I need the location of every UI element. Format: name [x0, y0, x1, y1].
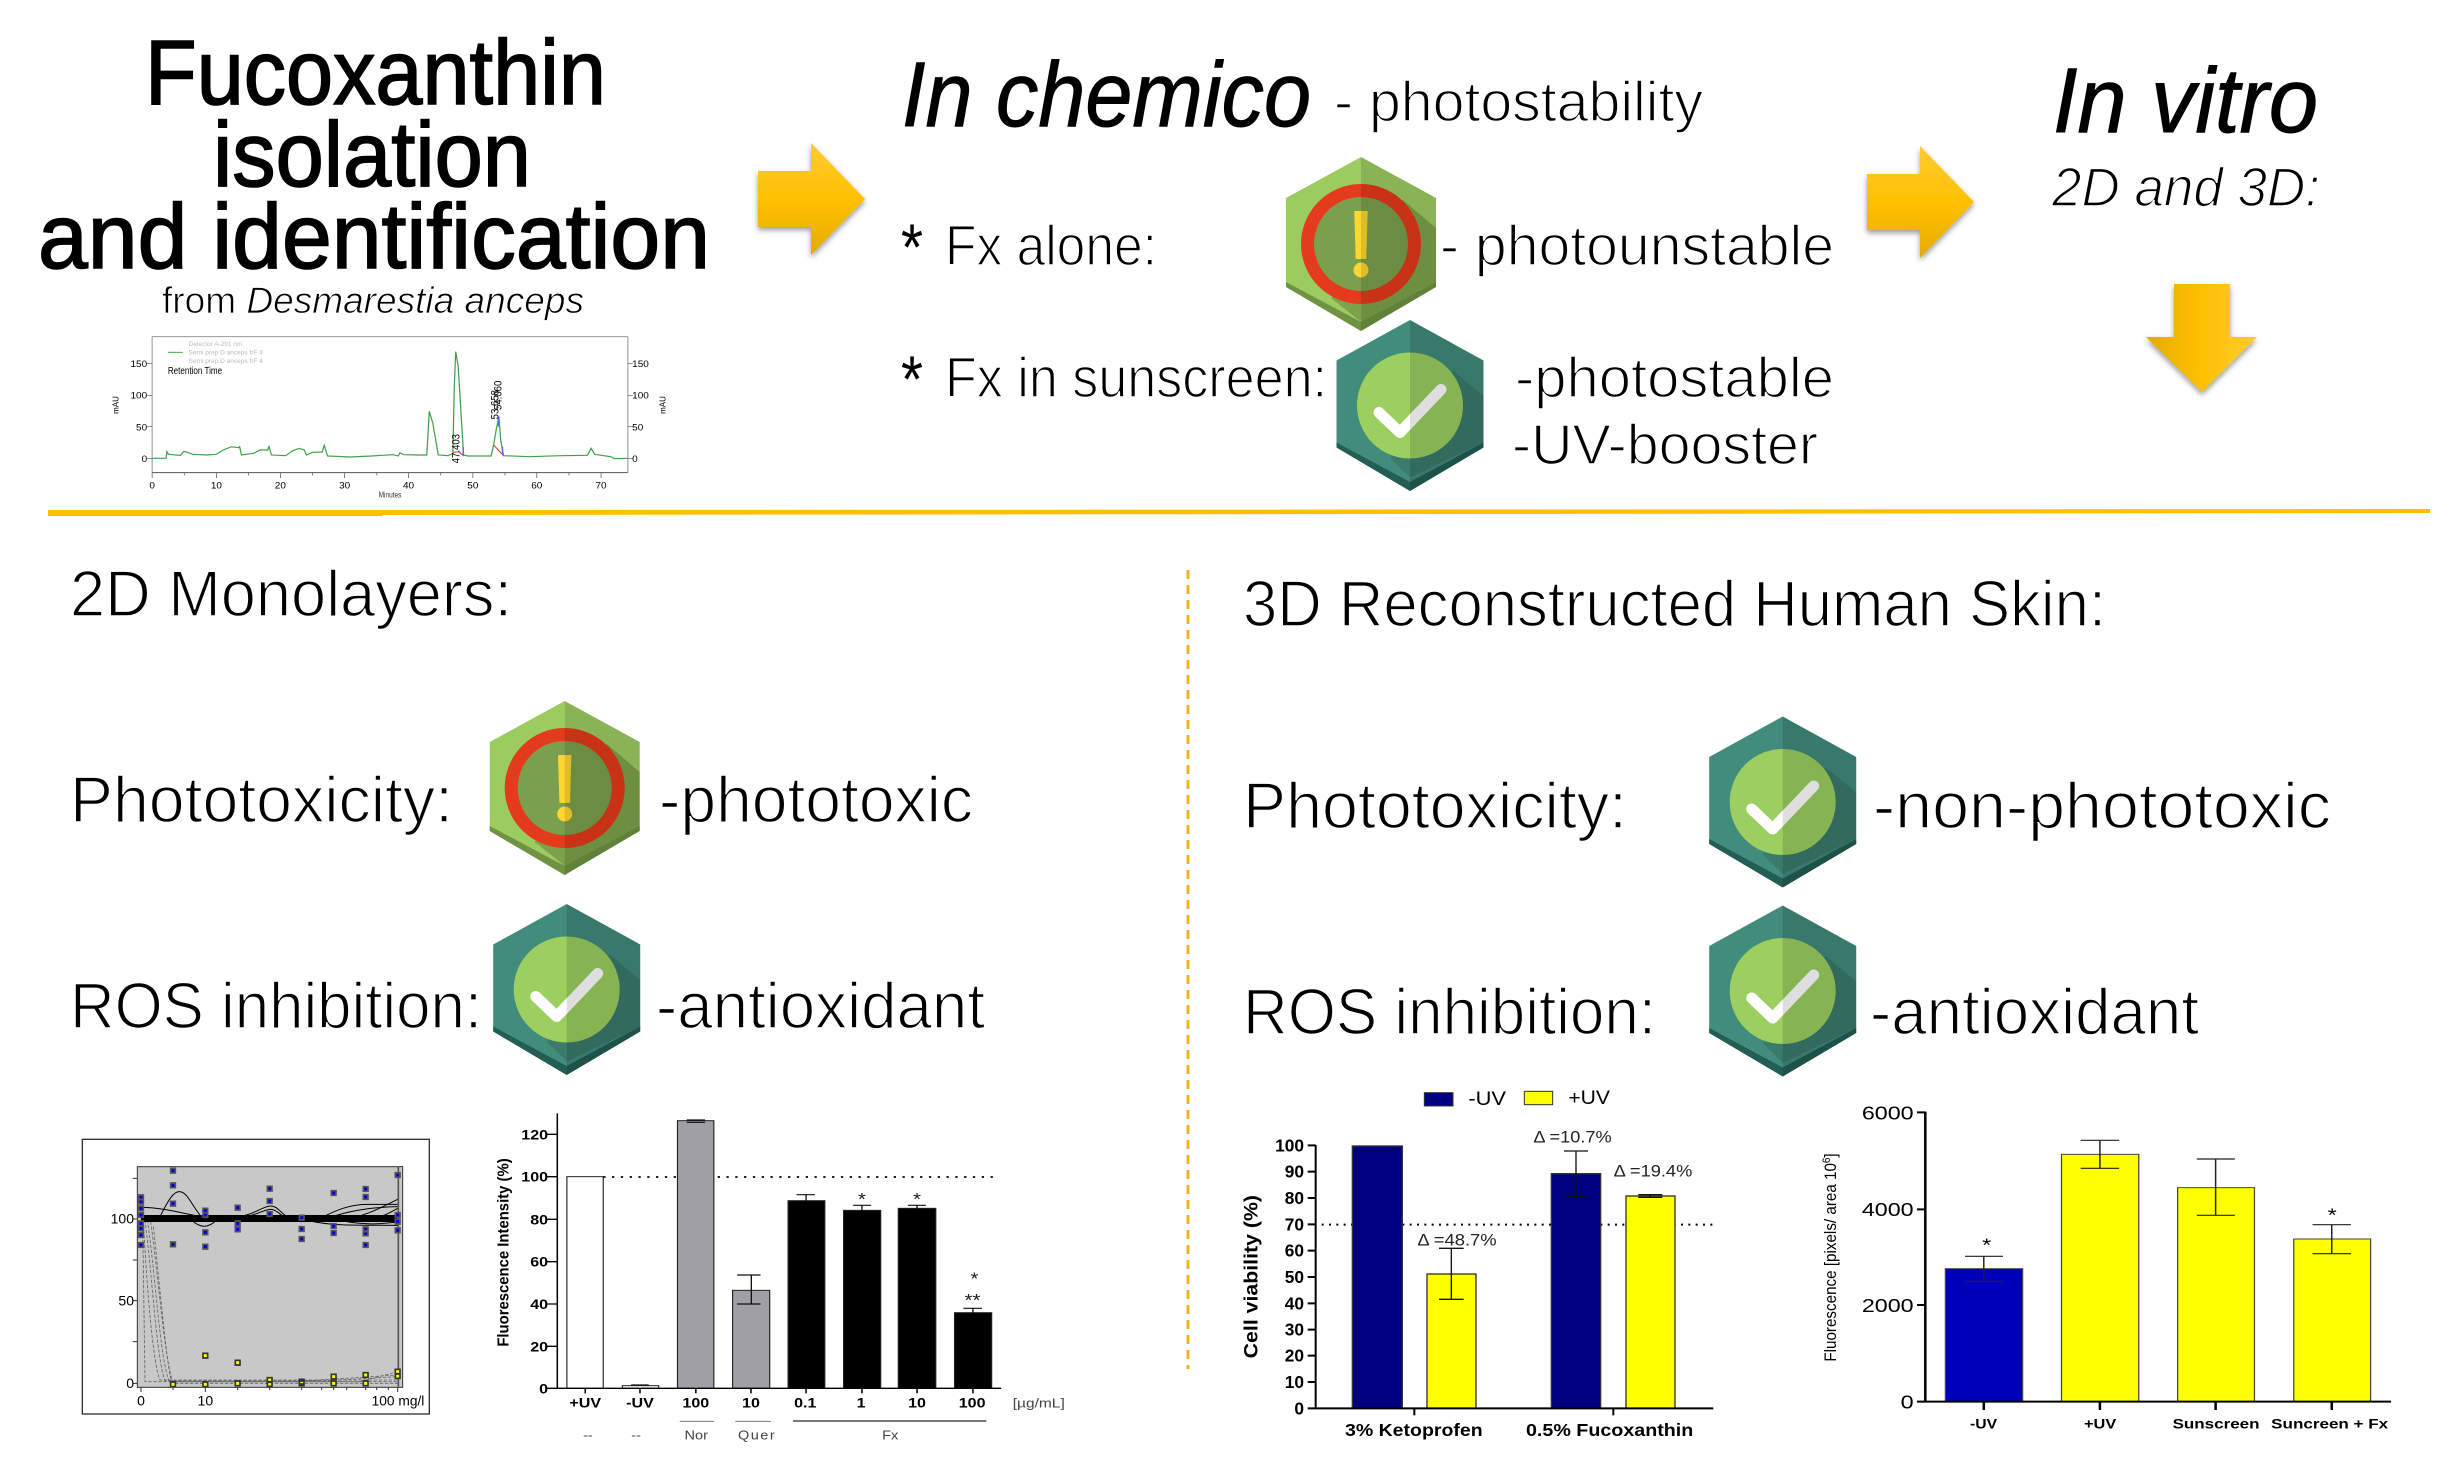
x labels	[569, 1396, 1065, 1411]
row: ROS inhibition label: ROS inhibition:	[1243, 975, 1656, 1048]
x labels: 10	[908, 1396, 926, 1411]
heading: 3D Reconstructed Human Skin:	[1243, 567, 2106, 640]
axis labels	[110, 359, 668, 499]
axes	[547, 1113, 1001, 1393]
chart: fluorescence intensity bars	[496, 1113, 1065, 1442]
axis labels: 0	[137, 1393, 145, 1409]
axis labels: 0	[142, 454, 147, 465]
error bars	[1965, 1140, 2351, 1281]
row: ROS inhibition label: ROS inhibition:	[70, 969, 482, 1042]
text: phototoxic: -phototoxic	[659, 763, 973, 836]
y axis labels: 50	[1285, 1267, 1304, 1287]
axis labels: 10	[211, 481, 222, 492]
significance stars: **	[964, 1290, 981, 1311]
heading: In chemico: In chemico	[902, 44, 1311, 146]
axis labels: 70	[596, 481, 607, 492]
chart: cytotoxicity dose response	[82, 1139, 429, 1414]
peak labels: 53.658	[490, 390, 502, 419]
axis labels: 30	[339, 481, 350, 492]
axis labels: 40	[403, 481, 414, 492]
x labels: Sunscreen	[2173, 1417, 2259, 1432]
x labels: +UV	[2084, 1417, 2117, 1432]
group labels: Quer	[738, 1428, 775, 1442]
x labels: 0.1	[794, 1396, 816, 1411]
significance stars: *	[913, 1189, 922, 1210]
y axis labels: 30	[1285, 1320, 1304, 1340]
y axis labels: 100	[1275, 1135, 1304, 1155]
trace	[152, 352, 628, 459]
error bars	[631, 1120, 982, 1385]
icon: check hexagon	[493, 904, 640, 1075]
arrow: right 2	[1867, 146, 1974, 258]
y axis title: ]	[1822, 1153, 1840, 1158]
dose curves -UV (solid)	[141, 1192, 398, 1226]
title: and identification	[38, 186, 710, 288]
peak labels: 54.060	[493, 380, 505, 410]
x labels	[1970, 1417, 2388, 1432]
delta annotations: Δ =10.7%	[1533, 1128, 1612, 1147]
axis labels: 100	[130, 391, 147, 402]
y axis labels: 2000	[1862, 1296, 1914, 1316]
axis labels: 50	[136, 423, 147, 433]
icon: check hexagon	[1709, 716, 1856, 888]
significance stars	[858, 1189, 981, 1311]
axis labels: 150	[632, 359, 649, 370]
axis labels: 60	[531, 481, 542, 492]
legend: -UV	[1468, 1089, 1506, 1110]
group labels: --	[631, 1428, 641, 1442]
axis labels	[111, 1211, 424, 1409]
y axis labels: 60	[1285, 1241, 1304, 1261]
significance stars: *	[858, 1189, 866, 1210]
x labels: -UV	[1970, 1417, 1998, 1432]
text: Fx alone: *	[901, 210, 923, 284]
title: Fucoxanthin	[145, 22, 606, 124]
text: Fx alone: Fx alone:	[945, 214, 1157, 278]
text: Fx in sunscreen: Fx in sunscreen:	[945, 346, 1327, 410]
legend: Semi prep D anceps frF 4	[189, 350, 263, 356]
row: phototoxicity label: Phototoxicity:	[70, 763, 453, 836]
dose curves +UV (dashed)	[143, 1220, 398, 1383]
y axis labels	[1275, 1135, 1304, 1418]
y axis title: Fluorescence Intensity (%)	[496, 1158, 513, 1347]
axis labels: 0	[149, 481, 155, 492]
significance stars: *	[970, 1269, 979, 1289]
axis labels: mAU	[657, 396, 668, 414]
y axis title: Cell viability (%)	[1242, 1195, 1263, 1358]
y axis labels	[1862, 1103, 1914, 1413]
y axis labels: 100	[521, 1170, 548, 1185]
bars	[1352, 1146, 1675, 1408]
peak labels: 47.403	[451, 434, 462, 463]
text: antioxidant: -antioxidant	[656, 969, 985, 1042]
text: antioxidant: -antioxidant	[1870, 975, 2199, 1048]
y axis labels: 10	[1285, 1372, 1304, 1392]
axis labels: 150	[130, 359, 147, 370]
y axis labels: 0	[539, 1381, 548, 1397]
y axis labels: 60	[530, 1255, 548, 1270]
x labels: 10	[742, 1396, 760, 1411]
chart: HPLC chromatogram	[110, 337, 668, 499]
legend: Retention Time	[168, 366, 222, 377]
icon: check hexagon	[1709, 906, 1856, 1076]
x labels: [µg/mL]	[1013, 1397, 1065, 1410]
peak labels	[451, 380, 505, 463]
y axis title: Fluorescence [pixels/ area 10	[1822, 1188, 1840, 1362]
significance stars	[1982, 1206, 2337, 1256]
axis labels: 50	[632, 423, 643, 433]
text: photostable and UV-booster	[1512, 346, 1834, 477]
group labels: --	[583, 1428, 593, 1442]
heading: 2D Monolayers:	[70, 557, 512, 630]
x labels: -UV	[626, 1396, 654, 1411]
icon: warning hexagon	[490, 701, 640, 875]
icon: warning hexagon	[1286, 157, 1436, 331]
y axis labels: 80	[530, 1212, 548, 1228]
icon: check hexagon	[1336, 320, 1484, 491]
legend	[1424, 1088, 1610, 1110]
legend	[168, 341, 263, 377]
y axis labels: 90	[1285, 1162, 1304, 1182]
markers: yellow	[171, 1353, 400, 1387]
axis labels: 10	[198, 1393, 213, 1409]
axis labels: 0	[126, 1375, 134, 1391]
axis labels: 100 mg/l	[372, 1393, 424, 1409]
arrow: down	[2146, 284, 2257, 392]
text: Fx alone	[901, 210, 1157, 284]
heading: In chemico: - photostability	[1334, 70, 1703, 134]
heading: In vitro: In vitro	[2053, 50, 2318, 152]
group labels	[583, 1428, 899, 1442]
chart: cell viability	[1242, 1088, 1713, 1440]
axis labels: 20	[275, 481, 286, 492]
y axis labels: 40	[530, 1297, 548, 1313]
group labels: Nor	[685, 1428, 708, 1442]
error bars	[1439, 1151, 1662, 1299]
y axis labels: 40	[1285, 1293, 1304, 1313]
axis labels: 100	[111, 1211, 134, 1227]
legend: +UV	[1568, 1088, 1610, 1109]
axis labels: 50	[118, 1292, 134, 1308]
bars	[1945, 1154, 2371, 1402]
markers: blue	[139, 1168, 400, 1249]
bars	[567, 1121, 992, 1388]
text: photostable and UV-booster: -UV-booster	[1512, 413, 1818, 477]
legend: Semi prep D anceps frF 4	[189, 358, 263, 365]
row: phototoxicity label: Phototoxicity:	[1243, 769, 1627, 842]
y axis labels: 0	[1294, 1398, 1304, 1418]
subtitle: from Desmarestia anceps	[162, 280, 584, 321]
y axis labels: 0	[1901, 1392, 1914, 1413]
heading: In chemico	[902, 44, 1703, 146]
panel: 3D reconstructed human skin	[1242, 567, 2391, 1440]
x labels: +UV	[569, 1396, 601, 1411]
delta annotations: Δ =19.4%	[1614, 1162, 1693, 1181]
axis labels: 50	[467, 481, 478, 492]
heading: In vitro: 2D and 3D:	[2051, 156, 2320, 218]
axes	[1917, 1112, 2391, 1410]
y axis title: 6	[1821, 1157, 1833, 1163]
heading: In vitro	[2051, 50, 2320, 218]
y axis labels: 20	[530, 1339, 548, 1355]
x labels: Suncreen + Fx	[2271, 1417, 2388, 1432]
x labels: 100	[682, 1396, 709, 1411]
x labels: 1	[857, 1396, 866, 1411]
text: non-phototoxic: -non-phototoxic	[1873, 769, 2331, 842]
y axis labels	[521, 1127, 548, 1397]
legend: Detector A-291 nm	[189, 341, 242, 348]
panel: 2D monolayers	[70, 557, 1065, 1442]
delta annotations	[1417, 1128, 1693, 1250]
axis labels: 0	[632, 454, 638, 465]
y axis labels: 120	[521, 1127, 548, 1143]
arrow: right 1	[758, 143, 865, 255]
y axis labels: 80	[1285, 1188, 1304, 1208]
text: photostable and UV-booster: -photostable	[1515, 346, 1834, 410]
group labels: Fx	[882, 1428, 899, 1442]
x labels	[1345, 1420, 1693, 1440]
y axis labels: 70	[1285, 1214, 1304, 1234]
axis labels: 100	[632, 391, 649, 402]
delta annotations: Δ =48.7%	[1417, 1231, 1497, 1250]
x labels: 100	[959, 1396, 986, 1411]
x labels: 3% Ketoprofen	[1345, 1420, 1483, 1440]
chart: ROS fluorescence	[1821, 1103, 2391, 1432]
axis labels: mAU	[110, 396, 121, 414]
title: isolation	[213, 104, 531, 206]
x labels: 0.5% Fucoxanthin	[1526, 1420, 1693, 1440]
y axis labels: 4000	[1862, 1200, 1914, 1220]
title	[38, 22, 710, 288]
y axis labels: 6000	[1862, 1103, 1914, 1124]
axes	[1308, 1145, 1713, 1415]
text: photounstable: - photounstable	[1440, 214, 1834, 278]
significance stars: *	[2328, 1206, 2337, 1226]
y axis labels: 20	[1285, 1346, 1304, 1366]
axis labels: Minutes	[379, 490, 401, 499]
significance stars: *	[1982, 1236, 1991, 1256]
text: Fx in sunscreen: *	[901, 342, 923, 416]
